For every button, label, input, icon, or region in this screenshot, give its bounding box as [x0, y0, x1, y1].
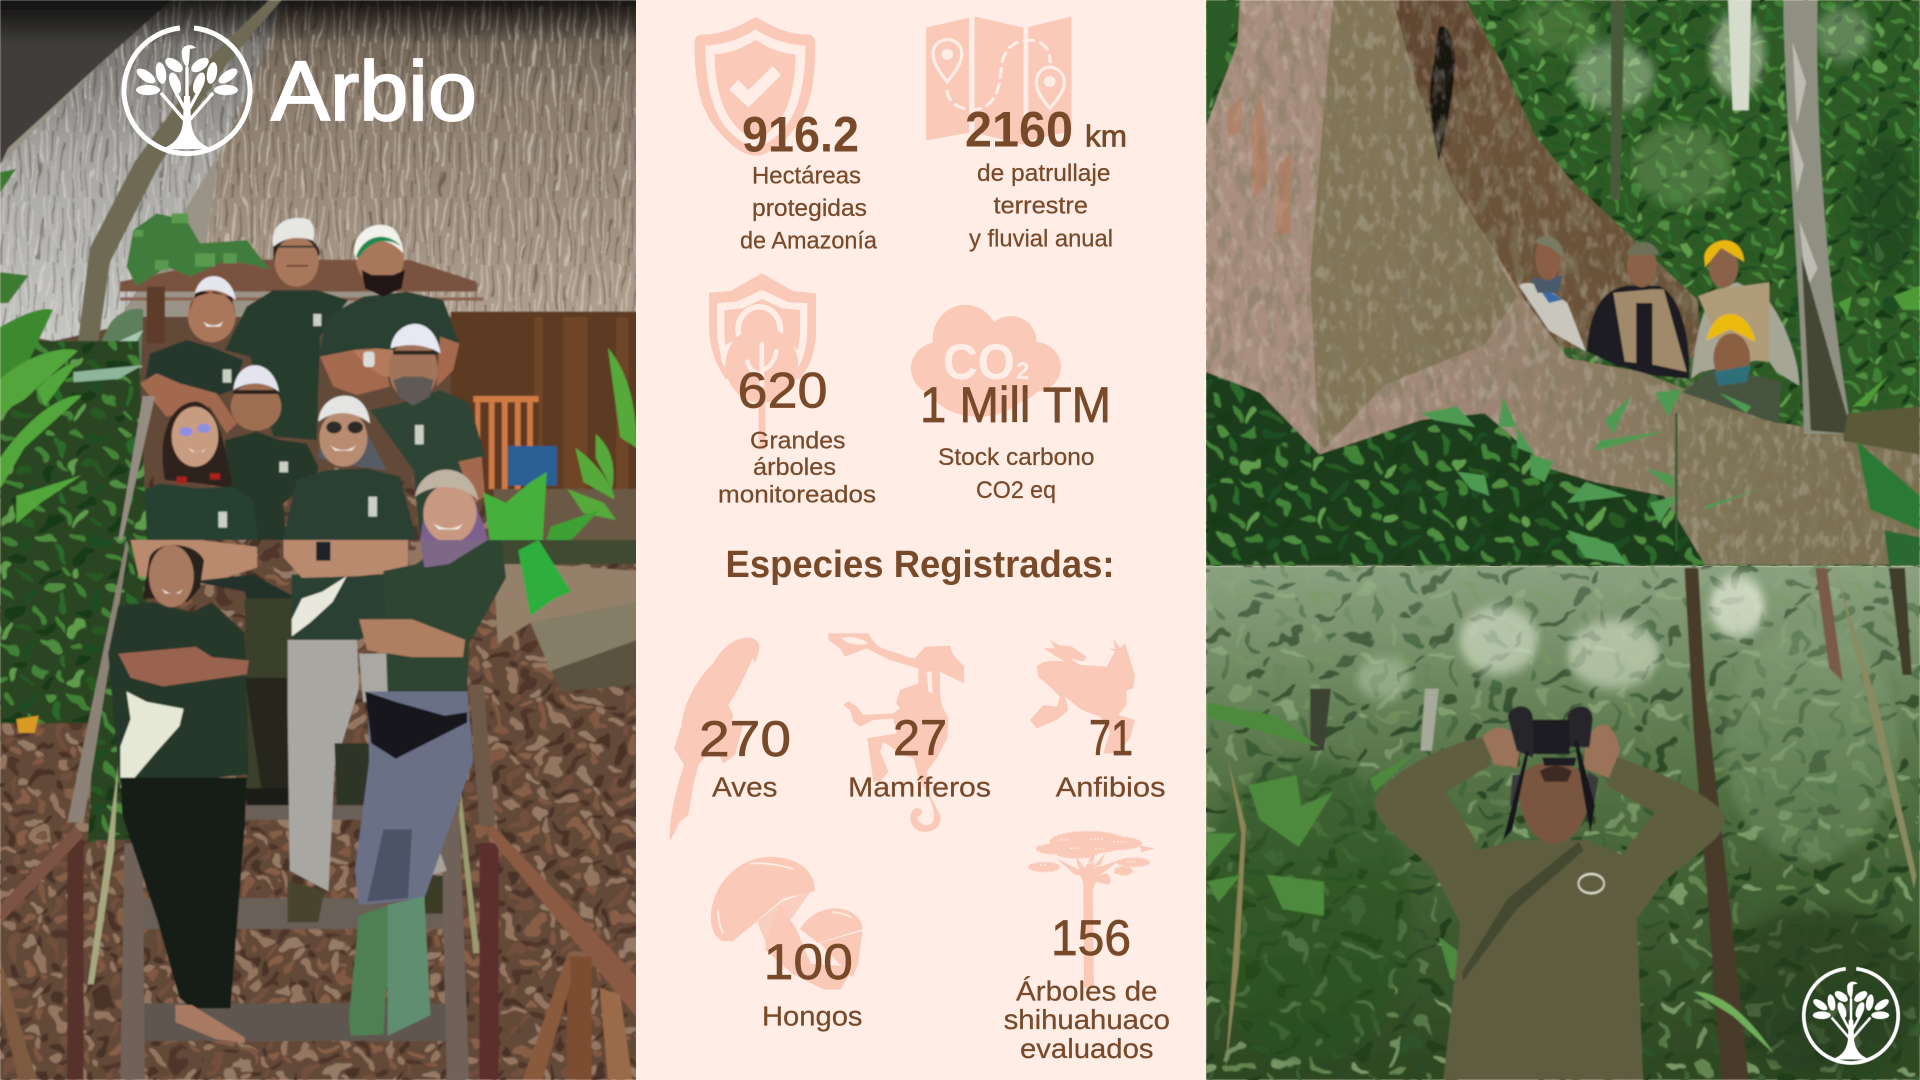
value: 100 — [764, 934, 853, 990]
stat: fungi — [762, 934, 862, 1032]
caption: y fluvial anual — [969, 226, 1113, 252]
icon: mushrooms — [711, 857, 863, 989]
caption: Hectáreas — [752, 162, 861, 190]
Aves: 270 — [699, 711, 791, 767]
icon label: CO2 in cloud: 2 — [1016, 358, 1029, 385]
icon: frog — [1030, 638, 1135, 753]
photo: field team at giant tree buttress — [1190, 0, 1920, 580]
caption: árboles — [753, 454, 836, 481]
value: 2160 — [965, 101, 1073, 157]
logo: Arbio — [124, 28, 477, 154]
icon: shield with tree — [709, 273, 816, 449]
caption: Hongos — [762, 1000, 862, 1032]
heading: species: Especies Registradas: — [726, 544, 1114, 586]
stats: species counts — [699, 710, 1166, 802]
value: 156 — [1051, 910, 1131, 966]
Mamíferos: 27 — [893, 710, 947, 766]
value: 620 — [738, 362, 828, 418]
unit: km — [1085, 118, 1127, 153]
icon: shield with check — [695, 17, 815, 156]
icon: monkey — [828, 633, 964, 832]
panel: central statistics — [636, 0, 1206, 1080]
caption: evaluados — [1020, 1033, 1154, 1064]
caption: protegidas — [752, 195, 867, 222]
stat: patrol — [965, 101, 1127, 252]
icon: shihuahuaco tree — [1029, 832, 1155, 988]
caption: Stock carbono — [938, 444, 1094, 471]
caption: Grandes — [750, 427, 846, 454]
caption: Árboles de — [1016, 976, 1158, 1007]
value: 1 Mill TM — [920, 377, 1111, 433]
icon: route map — [926, 17, 1072, 145]
photo: team in front of thatched hut — [0, 0, 660, 1080]
stat: large trees — [718, 362, 876, 509]
value: 916.2 — [742, 106, 859, 162]
caption Mamíferos: Mamíferos — [848, 772, 991, 802]
caption: de patrullaje — [977, 160, 1110, 187]
caption: terrestre — [994, 192, 1088, 220]
caption: CO2 eq — [976, 477, 1056, 504]
logo: small bottom-right mark — [1804, 969, 1898, 1063]
caption Anfibios: Anfibios — [1056, 772, 1166, 802]
caption Aves: Aves — [712, 772, 778, 802]
icon: parrot — [670, 638, 759, 841]
icon label: CO2 in cloud: CO — [943, 334, 1015, 390]
photo: ranger with binoculars in forest — [1190, 550, 1920, 1080]
stat: hectares — [740, 106, 878, 255]
logo wordmark: Arbio — [271, 44, 477, 138]
stat: carbon — [920, 377, 1111, 504]
stat: shihuahuaco trees — [1004, 910, 1170, 1064]
caption: de Amazonía — [740, 228, 878, 255]
Anfibios: 71 — [1089, 710, 1133, 766]
icon: CO2 cloud — [911, 305, 1061, 417]
caption: monitoreados — [718, 482, 876, 509]
caption: shihuahuaco — [1004, 1004, 1170, 1035]
